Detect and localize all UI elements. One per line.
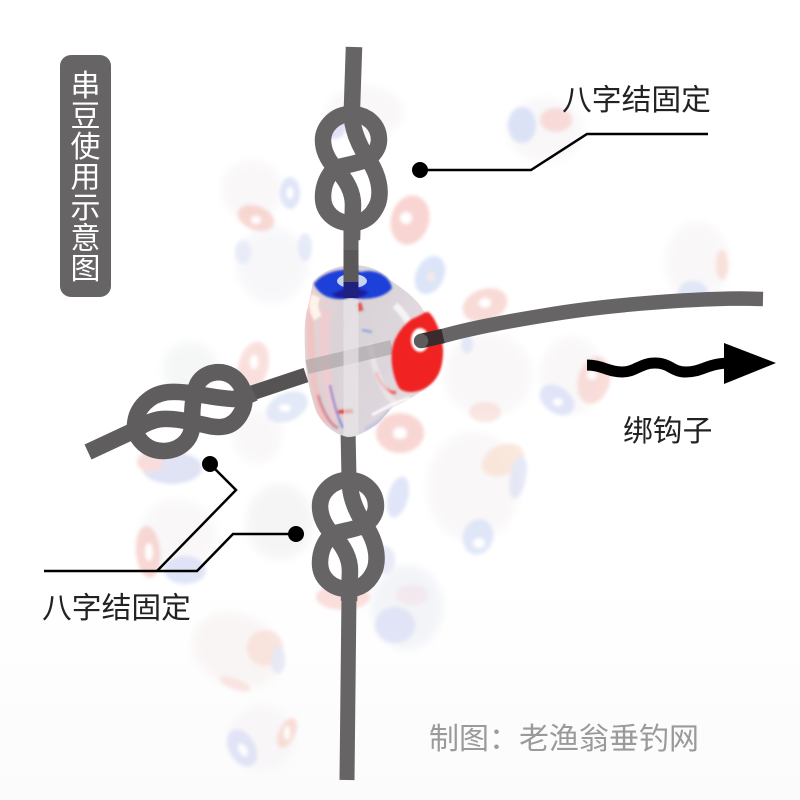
vertical title text [70,70,100,286]
vertical title text: 豆 [70,100,100,134]
dot, bottom knot [288,526,304,542]
vertical title text: 图 [70,253,100,286]
label: bottom left: 八字结固定 [42,592,191,625]
credit text: 制图：老渔翁垂钓网 [429,723,699,756]
leader to bottom knot [44,534,296,571]
figure-eight knot, left [88,372,254,452]
leader polyline [420,134,708,170]
arrow head [724,343,776,384]
vertical title text: 用 [70,162,100,194]
arrow: wavy direction [587,343,776,384]
hole opening, right [411,328,429,352]
bead body [305,265,443,437]
vertical title text: 使 [70,131,100,164]
vertical line, middle and bottom sections [347,230,351,780]
arrow shaft [587,363,730,372]
figure-eight knot, top [323,47,380,240]
leader line, top right [412,134,708,178]
blue hole [314,270,392,299]
faint background bead bodies [140,86,729,770]
leader lines, bottom left [44,456,304,571]
vertical title text: 串 [70,70,100,103]
red hole [392,312,443,392]
blue hole shading [332,286,368,298]
vertical title text: 示 [70,192,100,225]
title panel [60,55,111,297]
title background [60,55,111,297]
line inside blue hole [344,268,358,298]
horizontal line, left section [252,375,306,393]
dot, left knot [202,456,218,472]
bead streaks [307,295,410,436]
faint background bead spots [134,107,728,772]
hole opening, top [337,274,367,288]
leader dot [412,162,428,178]
label: top right: 八字结固定 [562,84,711,117]
line end in hole [414,334,428,348]
leader to left knot [157,464,236,571]
main bead [305,250,443,437]
figure-eight knot, bottom [320,473,377,601]
label: tie hook: 绑钩子 [623,415,712,448]
horizontal line, right section [436,298,763,338]
vertical title text: 意 [70,222,100,256]
line inside red hole [421,336,443,341]
line at top of hole [344,250,358,282]
